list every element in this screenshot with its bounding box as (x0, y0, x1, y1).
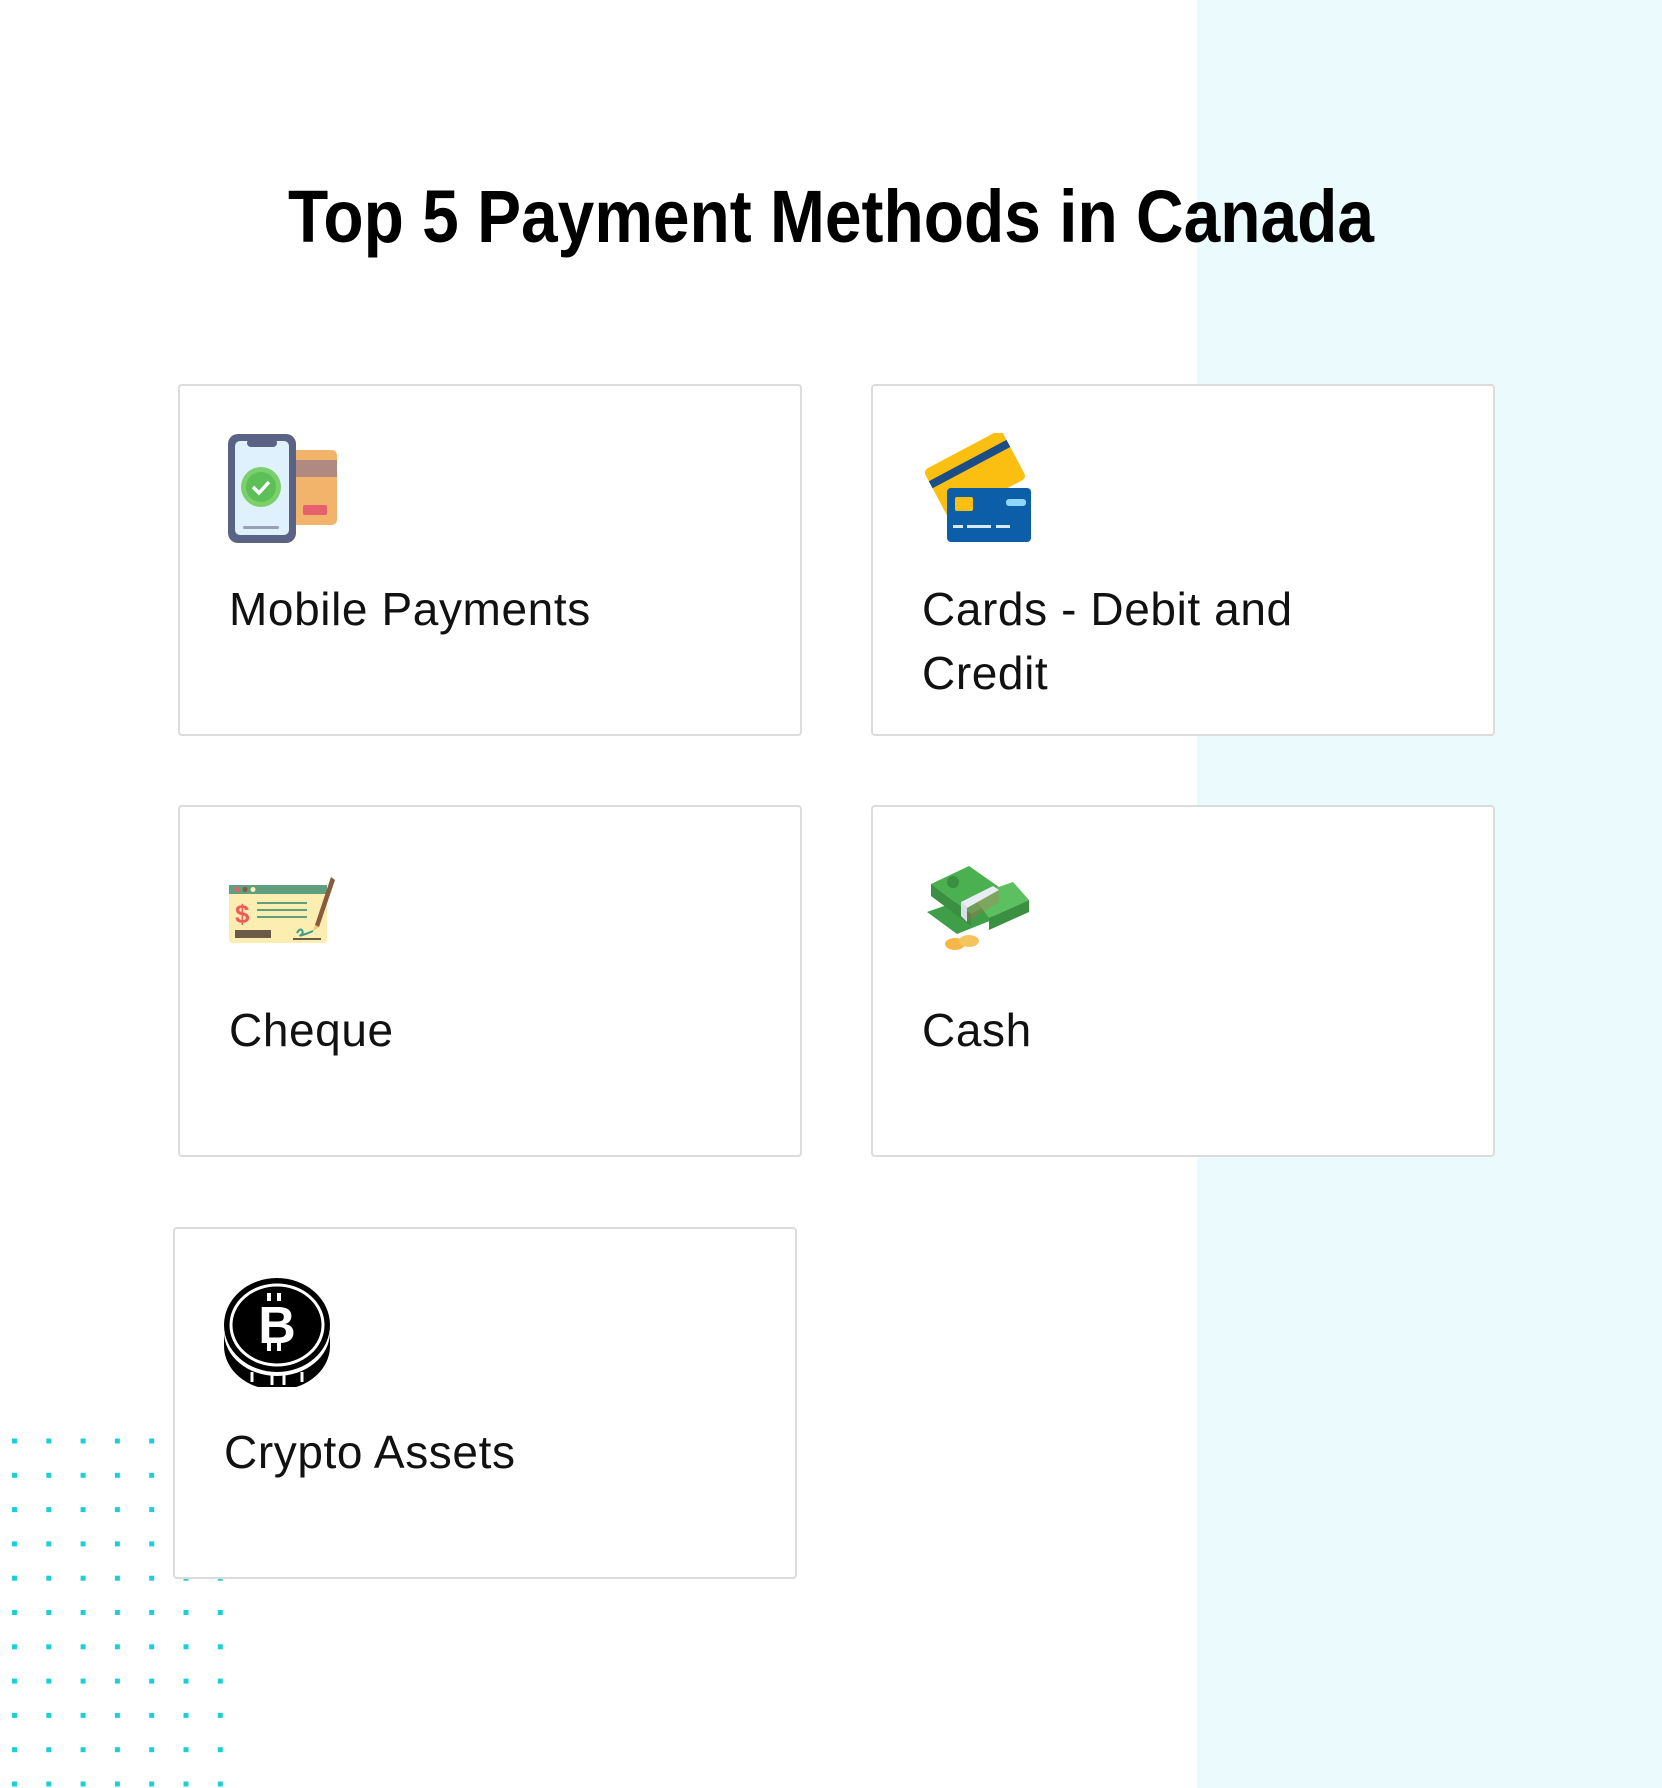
panel: mobile payments (178, 384, 802, 736)
panel: cheque (178, 805, 802, 1157)
icon: cash stack (927, 866, 1029, 950)
label: Credit (922, 647, 1048, 699)
icon: bitcoin coin (224, 1278, 330, 1387)
label: Cheque (229, 1004, 394, 1056)
label: Cards - Debit and (922, 583, 1293, 635)
label: Crypto Assets (224, 1426, 516, 1478)
dot pattern (12, 1438, 223, 1787)
panel: cash (871, 805, 1495, 1157)
label: Mobile Payments (229, 583, 591, 635)
title: Top 5 Payment Methods in Canada (288, 175, 1375, 258)
icon: cheque: $ (235, 899, 250, 929)
icon: bitcoin coin: B (258, 1297, 296, 1355)
icon: phone and card (228, 434, 337, 543)
icon: cheque (229, 877, 335, 943)
panel: crypto (173, 1227, 797, 1579)
label (922, 583, 1293, 699)
icon: credit cards (924, 433, 1031, 542)
panel: cards (871, 384, 1495, 736)
background panel (1197, 0, 1662, 1788)
label: Cash (922, 1004, 1032, 1056)
